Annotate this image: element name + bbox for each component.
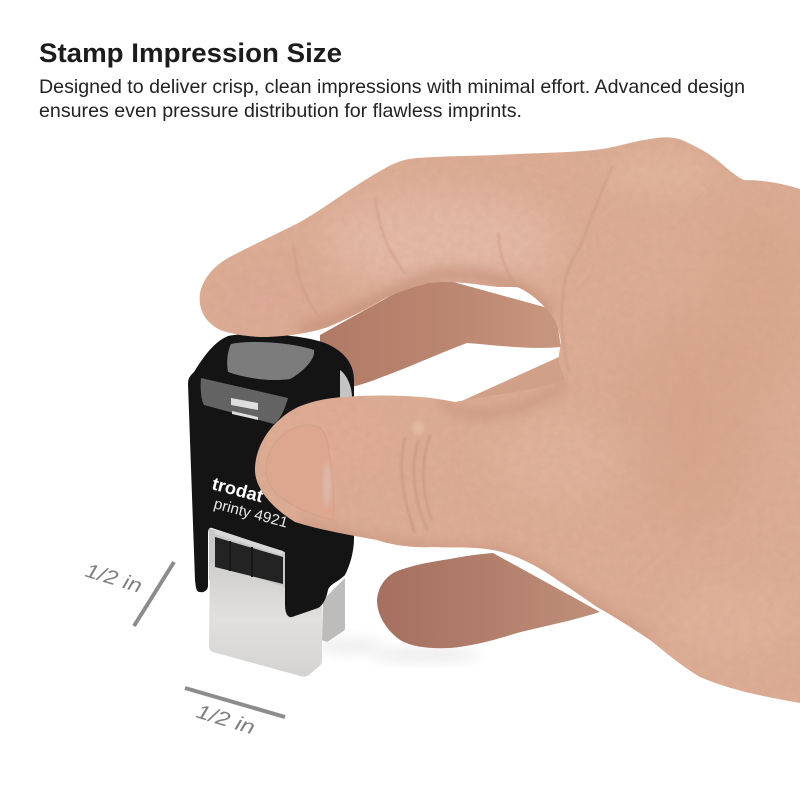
stamp model text: printy 4921	[212, 495, 290, 532]
lower finger	[377, 553, 600, 648]
stamp black body	[188, 334, 354, 617]
stamp top highlight	[227, 342, 314, 380]
description text: ensures even pressure distribution for flawless imprints.	[39, 100, 522, 122]
description text	[39, 76, 745, 122]
dimension label: left: 1/2 in	[83, 560, 144, 598]
title: Stamp Impression Size	[39, 38, 342, 68]
stamp clear window	[201, 378, 288, 424]
thumbnail	[266, 425, 334, 520]
stamp date band	[215, 530, 283, 584]
hand shading	[196, 194, 786, 714]
index finger creases	[294, 165, 613, 372]
description text: Designed to deliver crisp, clean impressions with minimal effort. Advanced design	[39, 76, 745, 98]
middle finger	[320, 275, 561, 400]
table shadows	[316, 637, 480, 662]
hand: index finger, back of hand and thumb	[190, 130, 800, 710]
dimension line: left	[134, 562, 174, 626]
thumb knuckle creases	[393, 421, 432, 533]
stamp grey base	[209, 528, 345, 677]
dimension line: bottom	[185, 688, 285, 717]
stamp	[188, 334, 354, 677]
dimension label: bottom: 1/2 in	[194, 701, 257, 739]
stamp side highlight	[340, 370, 352, 398]
stamp logo text: trodat	[210, 474, 265, 506]
stamp window indicator	[231, 398, 258, 420]
ring finger	[455, 357, 575, 420]
